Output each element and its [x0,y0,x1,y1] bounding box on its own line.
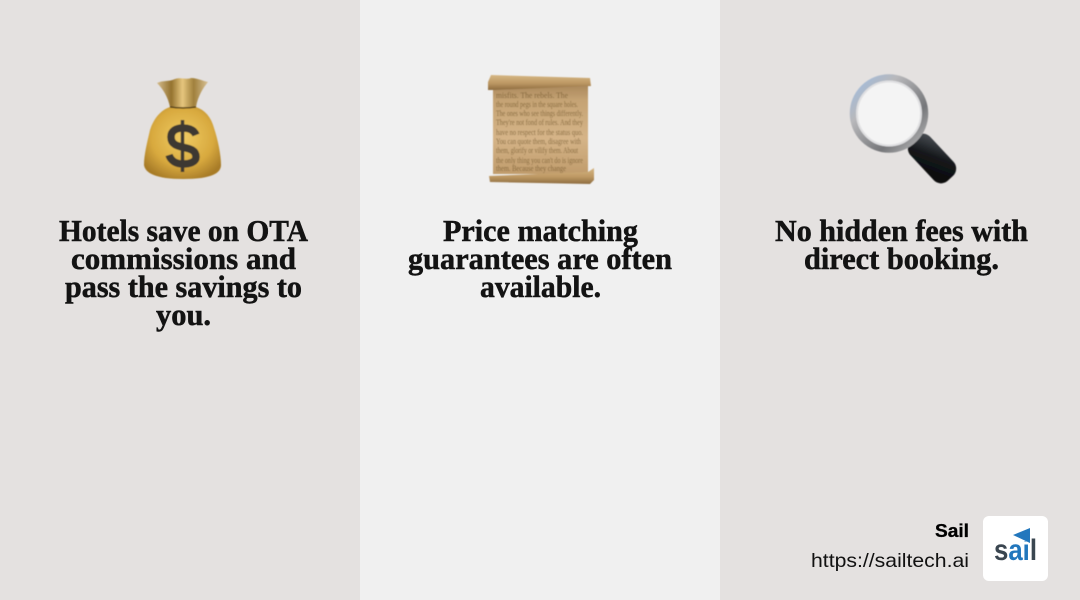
panel: no hidden fees [720,0,1080,600]
scroll text: them, glorify or vilify them. About [496,145,578,155]
scroll text: the round pegs in the square holes. [496,99,578,109]
icon: money bag [144,78,221,179]
scroll text: misfits. The rebels. The [496,90,568,100]
icon: magnifying glass [853,78,960,187]
heading: no hidden fees: direct booking. [804,242,999,276]
heading: price matching: available. [480,270,601,304]
logo: sail [983,516,1048,581]
brand name: Sail [935,521,969,541]
scroll text: The ones who see things differently. [496,108,583,118]
scroll text: them. Because they change [496,163,566,173]
scroll text: You can quote them, disagree with [496,136,582,146]
heading: hotel savings [59,214,308,332]
heading: price matching: Price matching [443,214,638,248]
icon: parchment scroll [488,75,594,184]
panel: price matching [360,0,720,600]
scroll text: They're not fond of rules. And they [496,117,584,127]
panel: hotel savings [0,0,360,600]
heading: no hidden fees [775,214,1028,276]
heading: hotel savings: you. [156,298,211,332]
heading: price matching: guarantees are often [408,242,672,276]
scroll text [496,90,584,173]
scroll text: the only thing you can't do is ignore [496,155,583,165]
heading: hotel savings: commissions and [71,242,296,276]
logo: sail: sail [994,534,1037,567]
brand url: https://sailtech.ai [811,550,969,572]
scroll text: have no respect for the status quo. [496,127,583,137]
heading: price matching [408,214,672,304]
heading: hotel savings: Hotels save on OTA [59,214,308,248]
heading: no hidden fees: No hidden fees with [775,214,1028,248]
heading: hotel savings: pass the savings to [65,270,302,304]
